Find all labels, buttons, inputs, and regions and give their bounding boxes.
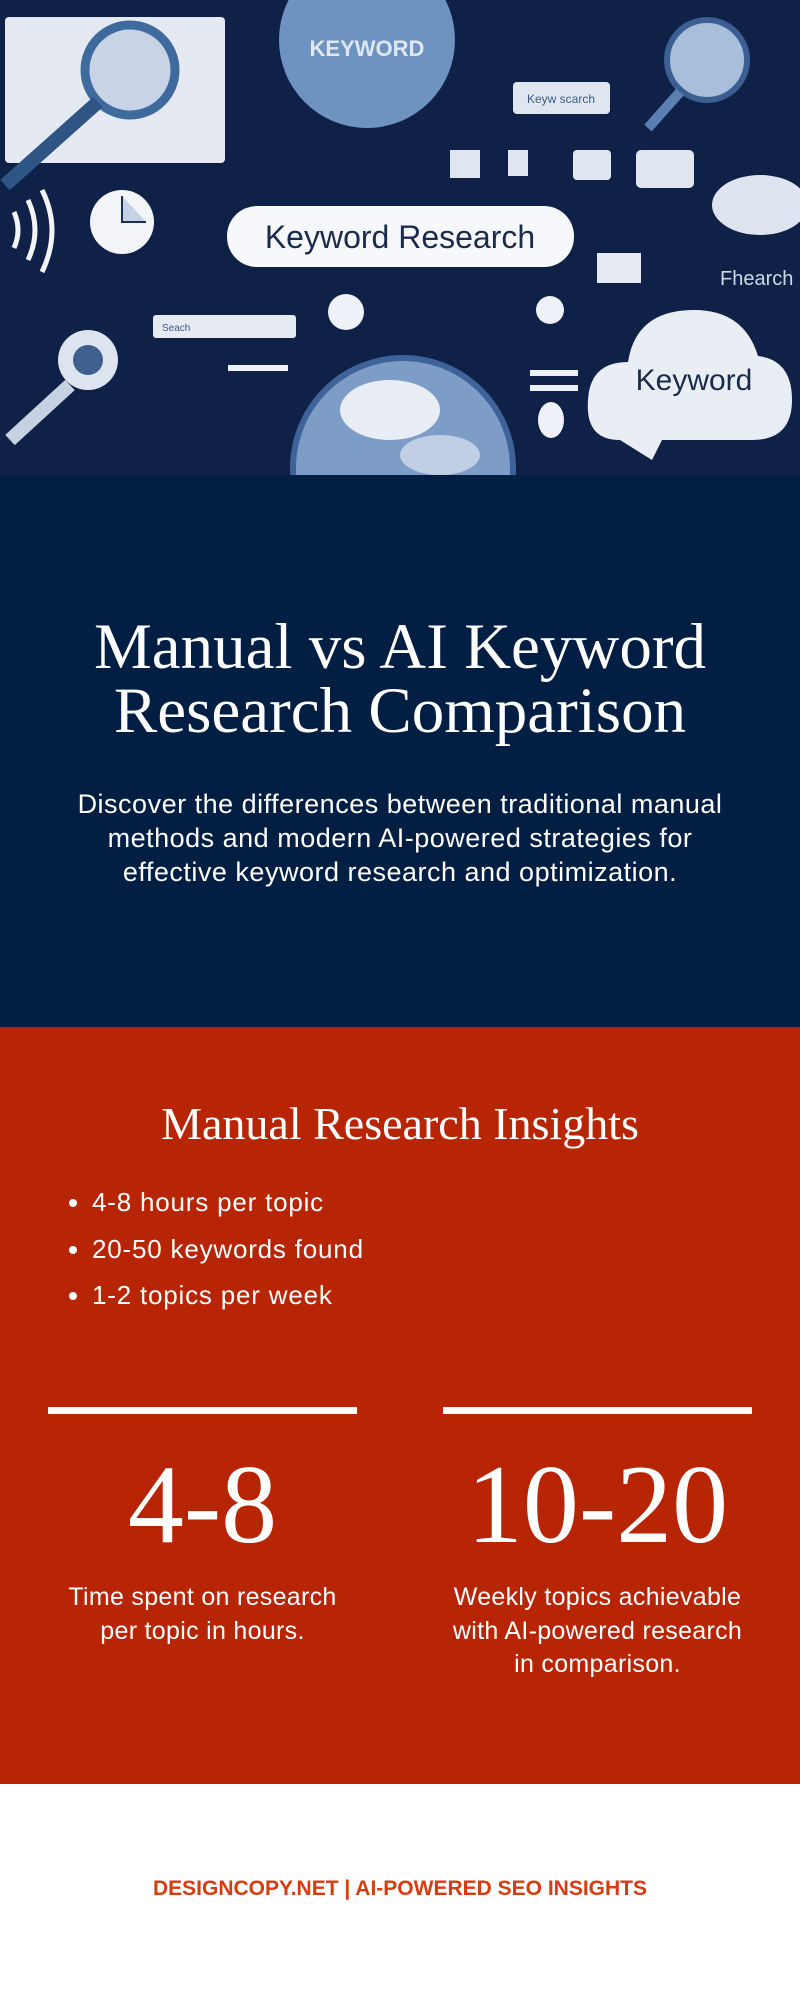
stat: hours: Time spent on research [68, 1583, 337, 1611]
title: Manual vs AI Keyword [94, 611, 706, 683]
icon: envelope small [597, 253, 793, 290]
title: Research Comparison [114, 675, 686, 747]
icon: gear magnifier [10, 330, 118, 440]
subtitle [78, 789, 722, 887]
stat: topics [443, 1407, 752, 1678]
bullet list: 20-50 keywords found [92, 1234, 364, 1264]
icon: search box: Seach [162, 323, 190, 334]
stat: topics: with AI-powered research [453, 1616, 742, 1644]
icon: wave [14, 190, 52, 272]
keyword research pill [227, 206, 574, 267]
heading: Manual Research Insights [161, 1098, 639, 1149]
stat: topics: Weekly topics achievable [454, 1583, 741, 1611]
subtitle: Discover the differences between traditional manual [78, 789, 722, 819]
icon: right globe magnifier [648, 20, 747, 128]
panel: manual research insights [0, 1027, 800, 1784]
icon: envelope small: Fhearch [720, 268, 793, 290]
icon: bottom globe [293, 358, 513, 578]
footer: DESIGNCOPY.NET | AI-POWERED SEO INSIGHTS [153, 1877, 647, 1900]
icon: envelope with magnifier [5, 17, 225, 185]
icon: top globe: KEYWORD [310, 36, 424, 61]
stat: hours: 4-8 [128, 1443, 277, 1567]
stat: hours: per topic in hours. [100, 1616, 305, 1644]
icon: clock [90, 190, 154, 254]
icon: top globe [279, 0, 455, 128]
hero image [0, 0, 800, 475]
stat: topics: in comparison. [514, 1650, 681, 1678]
subtitle: effective keyword research and optimization. [123, 857, 677, 887]
icon: cloud right [712, 175, 800, 235]
bullet list: 4-8 hours per topic [92, 1187, 324, 1217]
bullet list: 1-2 topics per week [92, 1280, 333, 1310]
stat: hours [48, 1407, 357, 1644]
footer [0, 1784, 800, 2000]
icon: search box [153, 315, 296, 338]
navy intro section [0, 475, 800, 1027]
keyword cloud [588, 310, 792, 460]
keyword cloud: Keyword [636, 364, 752, 397]
icon: bulbs and pins [228, 294, 578, 438]
stat: topics: 10-20 [467, 1443, 728, 1567]
icon: keyword bubble [513, 82, 610, 114]
icon: keyword bubble: Keyw scarch [527, 92, 595, 106]
subtitle: methods and modern AI-powered strategies for [108, 823, 692, 853]
icon: chat bubbles [450, 150, 694, 188]
bullet list [69, 1187, 364, 1310]
title [94, 611, 706, 747]
keyword research pill: Keyword Research [265, 219, 535, 255]
